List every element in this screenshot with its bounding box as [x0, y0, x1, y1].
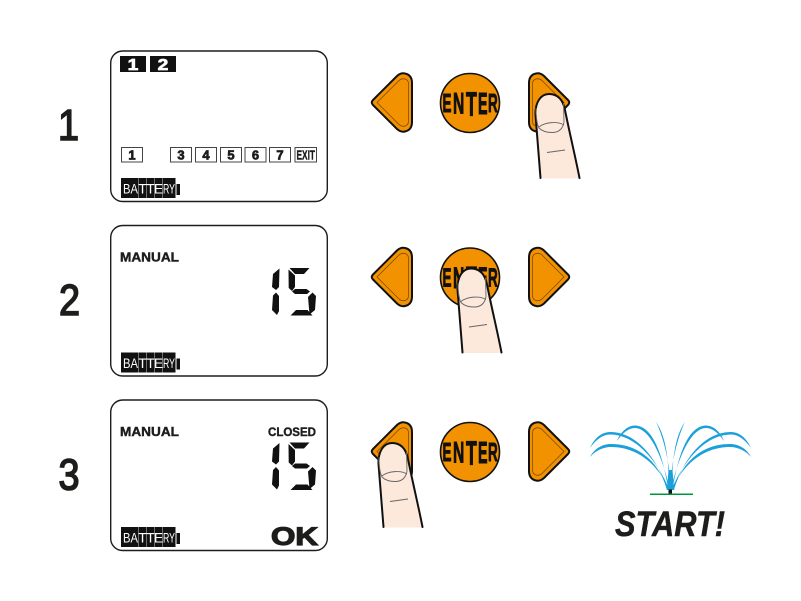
step number 1: 1	[58, 100, 79, 150]
ENTER button: T	[466, 260, 477, 298]
label MANUAL: MANUAL	[120, 424, 179, 439]
battery indicator: BA	[123, 530, 139, 546]
battery indicator	[121, 352, 180, 372]
label MANUAL: MANUAL	[120, 250, 179, 264]
key 5: 5	[227, 148, 235, 162]
label CLOSED: CLOSED	[268, 425, 316, 439]
battery indicator: BA	[123, 180, 139, 196]
ENTER button: N	[453, 436, 464, 469]
battery indicator: E	[154, 355, 163, 371]
ENTER button: E	[442, 440, 452, 467]
ENTER button: N	[453, 87, 464, 120]
ENTER button: E	[442, 265, 452, 293]
key 7	[270, 148, 290, 162]
battery indicator	[121, 178, 180, 198]
battery indicator: T	[138, 530, 147, 546]
key 3	[170, 148, 192, 162]
ENTER button: N	[453, 262, 464, 294]
black tab 1	[120, 56, 146, 74]
sprinkler nozzle	[668, 490, 672, 494]
panel: display step 2	[111, 226, 327, 376]
icon: sprinkler water arcs	[590, 422, 751, 495]
panel: display step 3	[111, 400, 327, 551]
battery indicator: BA	[123, 355, 139, 371]
key 4	[196, 148, 216, 162]
key EXIT	[295, 148, 316, 162]
battery indicator: T	[146, 180, 155, 196]
battery indicator: T	[146, 530, 155, 546]
battery indicator: T	[138, 180, 147, 196]
key 6: 6	[252, 148, 259, 162]
battery indicator: E	[154, 180, 163, 196]
ground line	[650, 494, 693, 495]
ENTER button: T	[466, 85, 477, 123]
controls row 2	[372, 248, 569, 353]
left arrow button	[372, 248, 412, 306]
seven-segment value 15	[272, 442, 316, 490]
ENTER button: R	[488, 265, 498, 293]
right arrow button	[529, 73, 569, 132]
ENTER button: T	[466, 434, 477, 472]
ENTER button: E	[478, 262, 488, 296]
black tab 2: 2	[158, 56, 169, 74]
battery indicator: RY	[163, 355, 175, 371]
step number 3: 3	[58, 450, 80, 499]
key 1	[122, 148, 142, 162]
key 5	[220, 148, 242, 162]
ENTER button: E	[442, 91, 452, 118]
controls row 1	[372, 73, 580, 178]
controls row 3	[372, 422, 569, 528]
battery indicator: T	[146, 355, 155, 371]
key EXIT: EXIT	[296, 148, 315, 162]
black tab 1: 1	[128, 56, 139, 74]
step number 2: 2	[59, 275, 80, 325]
right arrow button	[529, 248, 569, 306]
left arrow button	[372, 73, 412, 132]
ENTER button	[440, 74, 500, 132]
key 1: 1	[128, 148, 136, 162]
right arrow button	[529, 422, 569, 481]
black tab 2	[150, 56, 176, 74]
key 4: 4	[202, 148, 210, 162]
ENTER button	[440, 422, 500, 482]
icon: finger pressing right arrow	[535, 94, 580, 178]
left arrow button	[372, 422, 412, 481]
label OK: OK	[271, 523, 318, 551]
ENTER button: R	[488, 91, 498, 118]
seven-segment value 15	[272, 268, 316, 316]
battery indicator: RY	[163, 530, 175, 546]
key 6	[245, 148, 266, 162]
battery indicator: E	[154, 530, 163, 546]
battery indicator: RY	[163, 180, 175, 196]
ENTER button	[440, 248, 500, 307]
key 7: 7	[276, 148, 284, 162]
battery indicator	[121, 527, 180, 547]
ENTER button: E	[478, 87, 488, 122]
icon: finger pressing ENTER	[457, 268, 502, 353]
ENTER button: R	[488, 440, 498, 467]
ENTER button: E	[478, 436, 488, 471]
battery indicator: T	[138, 355, 147, 371]
label START!: START!	[615, 505, 725, 544]
key 3: 3	[177, 148, 185, 162]
icon: finger pressing left arrow	[378, 443, 423, 528]
panel: display step 1	[111, 51, 327, 202]
